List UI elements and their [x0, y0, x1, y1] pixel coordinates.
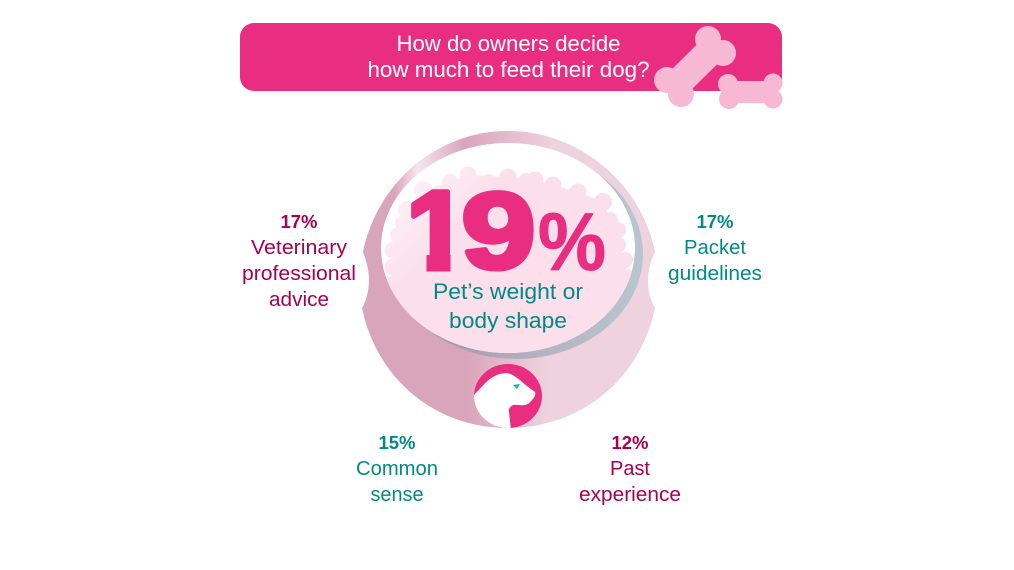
headline 19%	[411, 189, 604, 272]
title text	[368, 31, 650, 82]
bowl body	[362, 131, 655, 428]
stat: past experience: experience	[579, 484, 681, 506]
headline 19%: 1	[406, 168, 468, 293]
stat: common sense: 15%	[378, 433, 416, 453]
stat: common sense	[356, 433, 438, 506]
stat: packet guidelines: Packet	[684, 237, 746, 259]
headline 19%: %	[538, 197, 606, 288]
bowl inner shadow	[389, 149, 643, 359]
title text: How do owners decide	[396, 31, 620, 56]
bowl rim	[363, 131, 655, 252]
stat: past experience: Past	[610, 458, 650, 480]
stat: common sense: sense	[370, 484, 424, 506]
stat: veterinary professional advice	[242, 212, 356, 311]
headline label: body shape	[449, 308, 567, 333]
stat: veterinary professional advice: 17%	[280, 212, 318, 232]
icon: dog badge	[470, 364, 542, 430]
bowl interior	[381, 143, 635, 353]
title banner	[240, 23, 782, 91]
stat: common sense: Common	[356, 458, 438, 480]
headline label	[433, 279, 583, 333]
title text: how much to feed their dog?	[368, 57, 650, 82]
icon: large bone	[654, 26, 736, 107]
dog food	[380, 166, 640, 360]
headline label: Pet’s weight or	[433, 279, 583, 304]
stat: packet guidelines: guidelines	[668, 263, 762, 285]
stat: veterinary professional advice: advice	[269, 289, 329, 311]
stat: past experience: 12%	[612, 433, 648, 453]
icon: small bone	[718, 74, 782, 109]
stat: packet guidelines: 17%	[696, 212, 734, 232]
stat: veterinary professional advice: professional	[242, 263, 356, 285]
food bowl	[362, 131, 655, 430]
stat: veterinary professional advice: Veterinary	[251, 237, 347, 259]
headline 19%: 9	[462, 170, 536, 291]
stat: packet guidelines	[668, 212, 762, 285]
stat: past experience	[579, 433, 681, 506]
